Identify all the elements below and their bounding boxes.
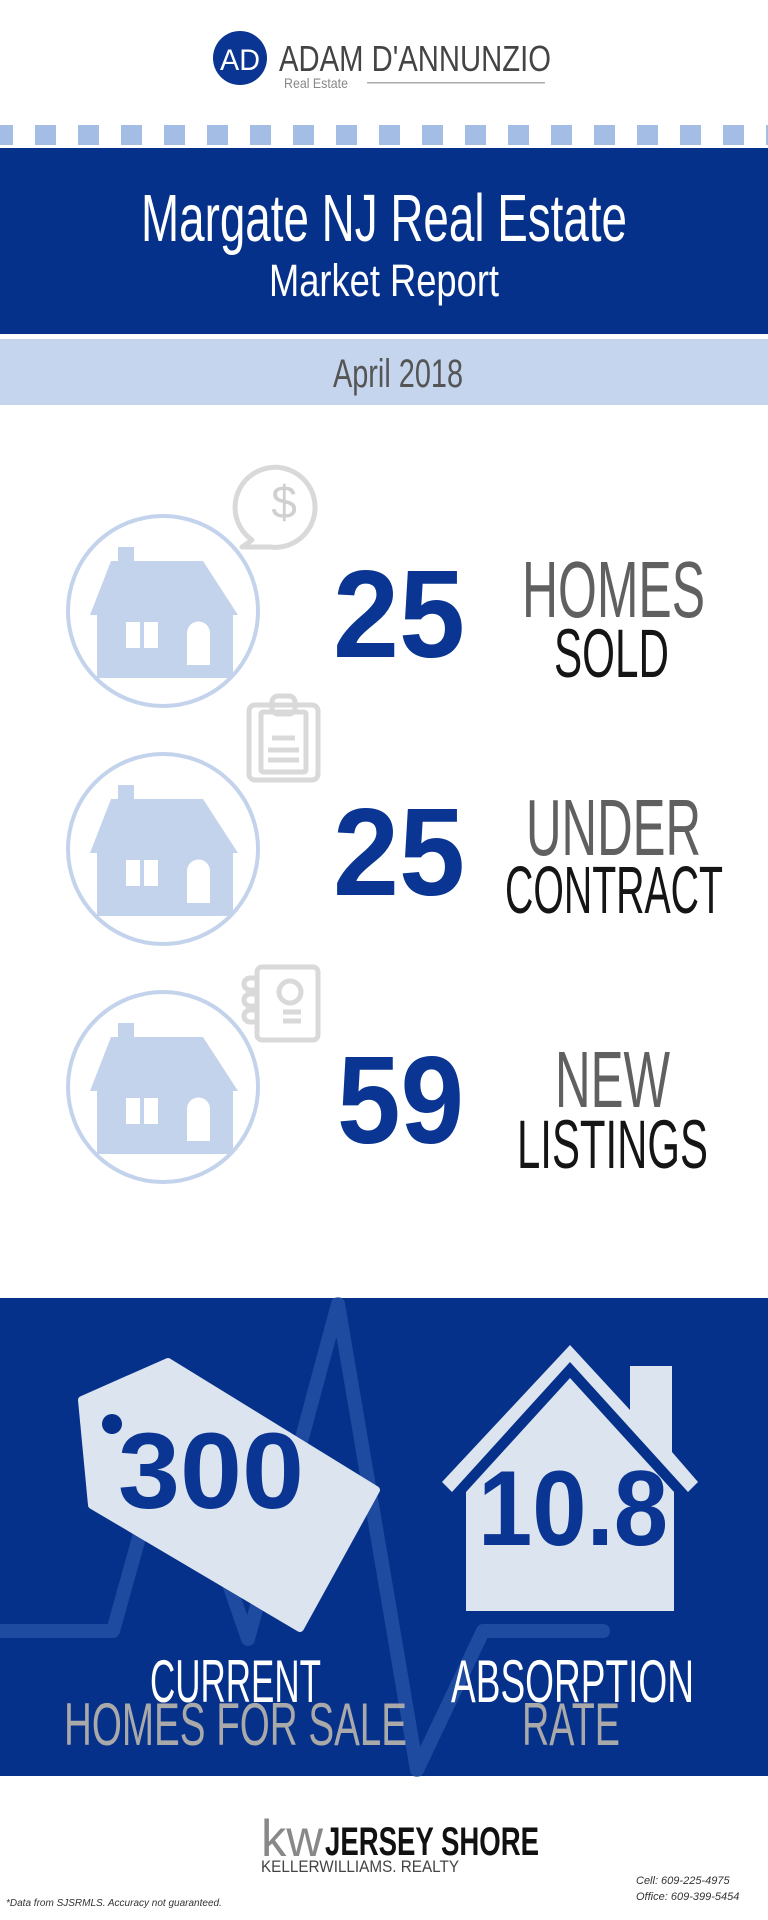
footer logo: KW Jersey Shore: kw	[261, 1810, 323, 1868]
stat: 59: 59	[337, 1032, 464, 1170]
contact info: Cell: 609-225-4975	[636, 1875, 730, 1887]
logo: Adam D'Annunzio: ADAM D'ANNUNZIO	[279, 38, 551, 79]
icon: house in circle	[68, 516, 258, 706]
footer logo: KW Jersey Shore: JERSEY SHORE	[325, 1820, 539, 1864]
icon: house 10.8	[442, 1345, 698, 1611]
contact info: Office: 609-399-5454	[636, 1891, 739, 1903]
label: new listings	[517, 1035, 708, 1183]
label: under contract	[505, 783, 723, 928]
icon: price tag 300: 300	[118, 1410, 304, 1531]
label: homes sold	[522, 545, 705, 692]
icon: clipboard	[249, 696, 318, 780]
icon: dollar speech bubble: $	[271, 476, 297, 528]
icon: house 10.8: 10.8	[478, 1448, 668, 1568]
footer logo: KW Jersey Shore	[261, 1810, 539, 1876]
icon: house in circle	[68, 992, 258, 1182]
title banner	[0, 148, 768, 334]
row: homes sold	[68, 467, 705, 706]
stat: 25: 25	[333, 546, 465, 684]
label: current homes for sale: CURRENT	[150, 1648, 321, 1715]
title banner: Market Report	[269, 255, 499, 306]
label: current homes for sale	[64, 1648, 407, 1758]
panel: market stats	[0, 1298, 768, 1776]
logo: Adam D'Annunzio: Real Estate	[284, 75, 348, 91]
logo: Adam D'Annunzio	[213, 31, 551, 91]
icon: price tag 300	[82, 1362, 376, 1628]
label: current homes for sale: HOMES FOR SALE	[64, 1691, 407, 1758]
date band	[0, 339, 768, 405]
icon: notebook	[244, 967, 318, 1040]
date band: April 2018	[333, 352, 463, 396]
footer logo: KW Jersey Shore: KELLERWILLIAMS. REALTY	[261, 1857, 459, 1876]
contact info	[636, 1875, 739, 1903]
footnote: *Data from SJSRMLS. Accuracy not guaranteed.	[6, 1898, 222, 1909]
label: absorption rate: RATE	[522, 1691, 620, 1758]
label: homes sold: SOLD	[554, 615, 669, 692]
label: new listings: NEW	[555, 1035, 670, 1124]
icon: dollar speech bubble	[235, 467, 315, 547]
icon: house in circle	[68, 754, 258, 944]
stat: 25: 25	[333, 784, 465, 922]
row: under contract	[68, 696, 723, 944]
row: new listings	[68, 967, 708, 1183]
label: absorption rate	[451, 1648, 694, 1758]
logo: Adam D'Annunzio: AD	[220, 44, 260, 77]
